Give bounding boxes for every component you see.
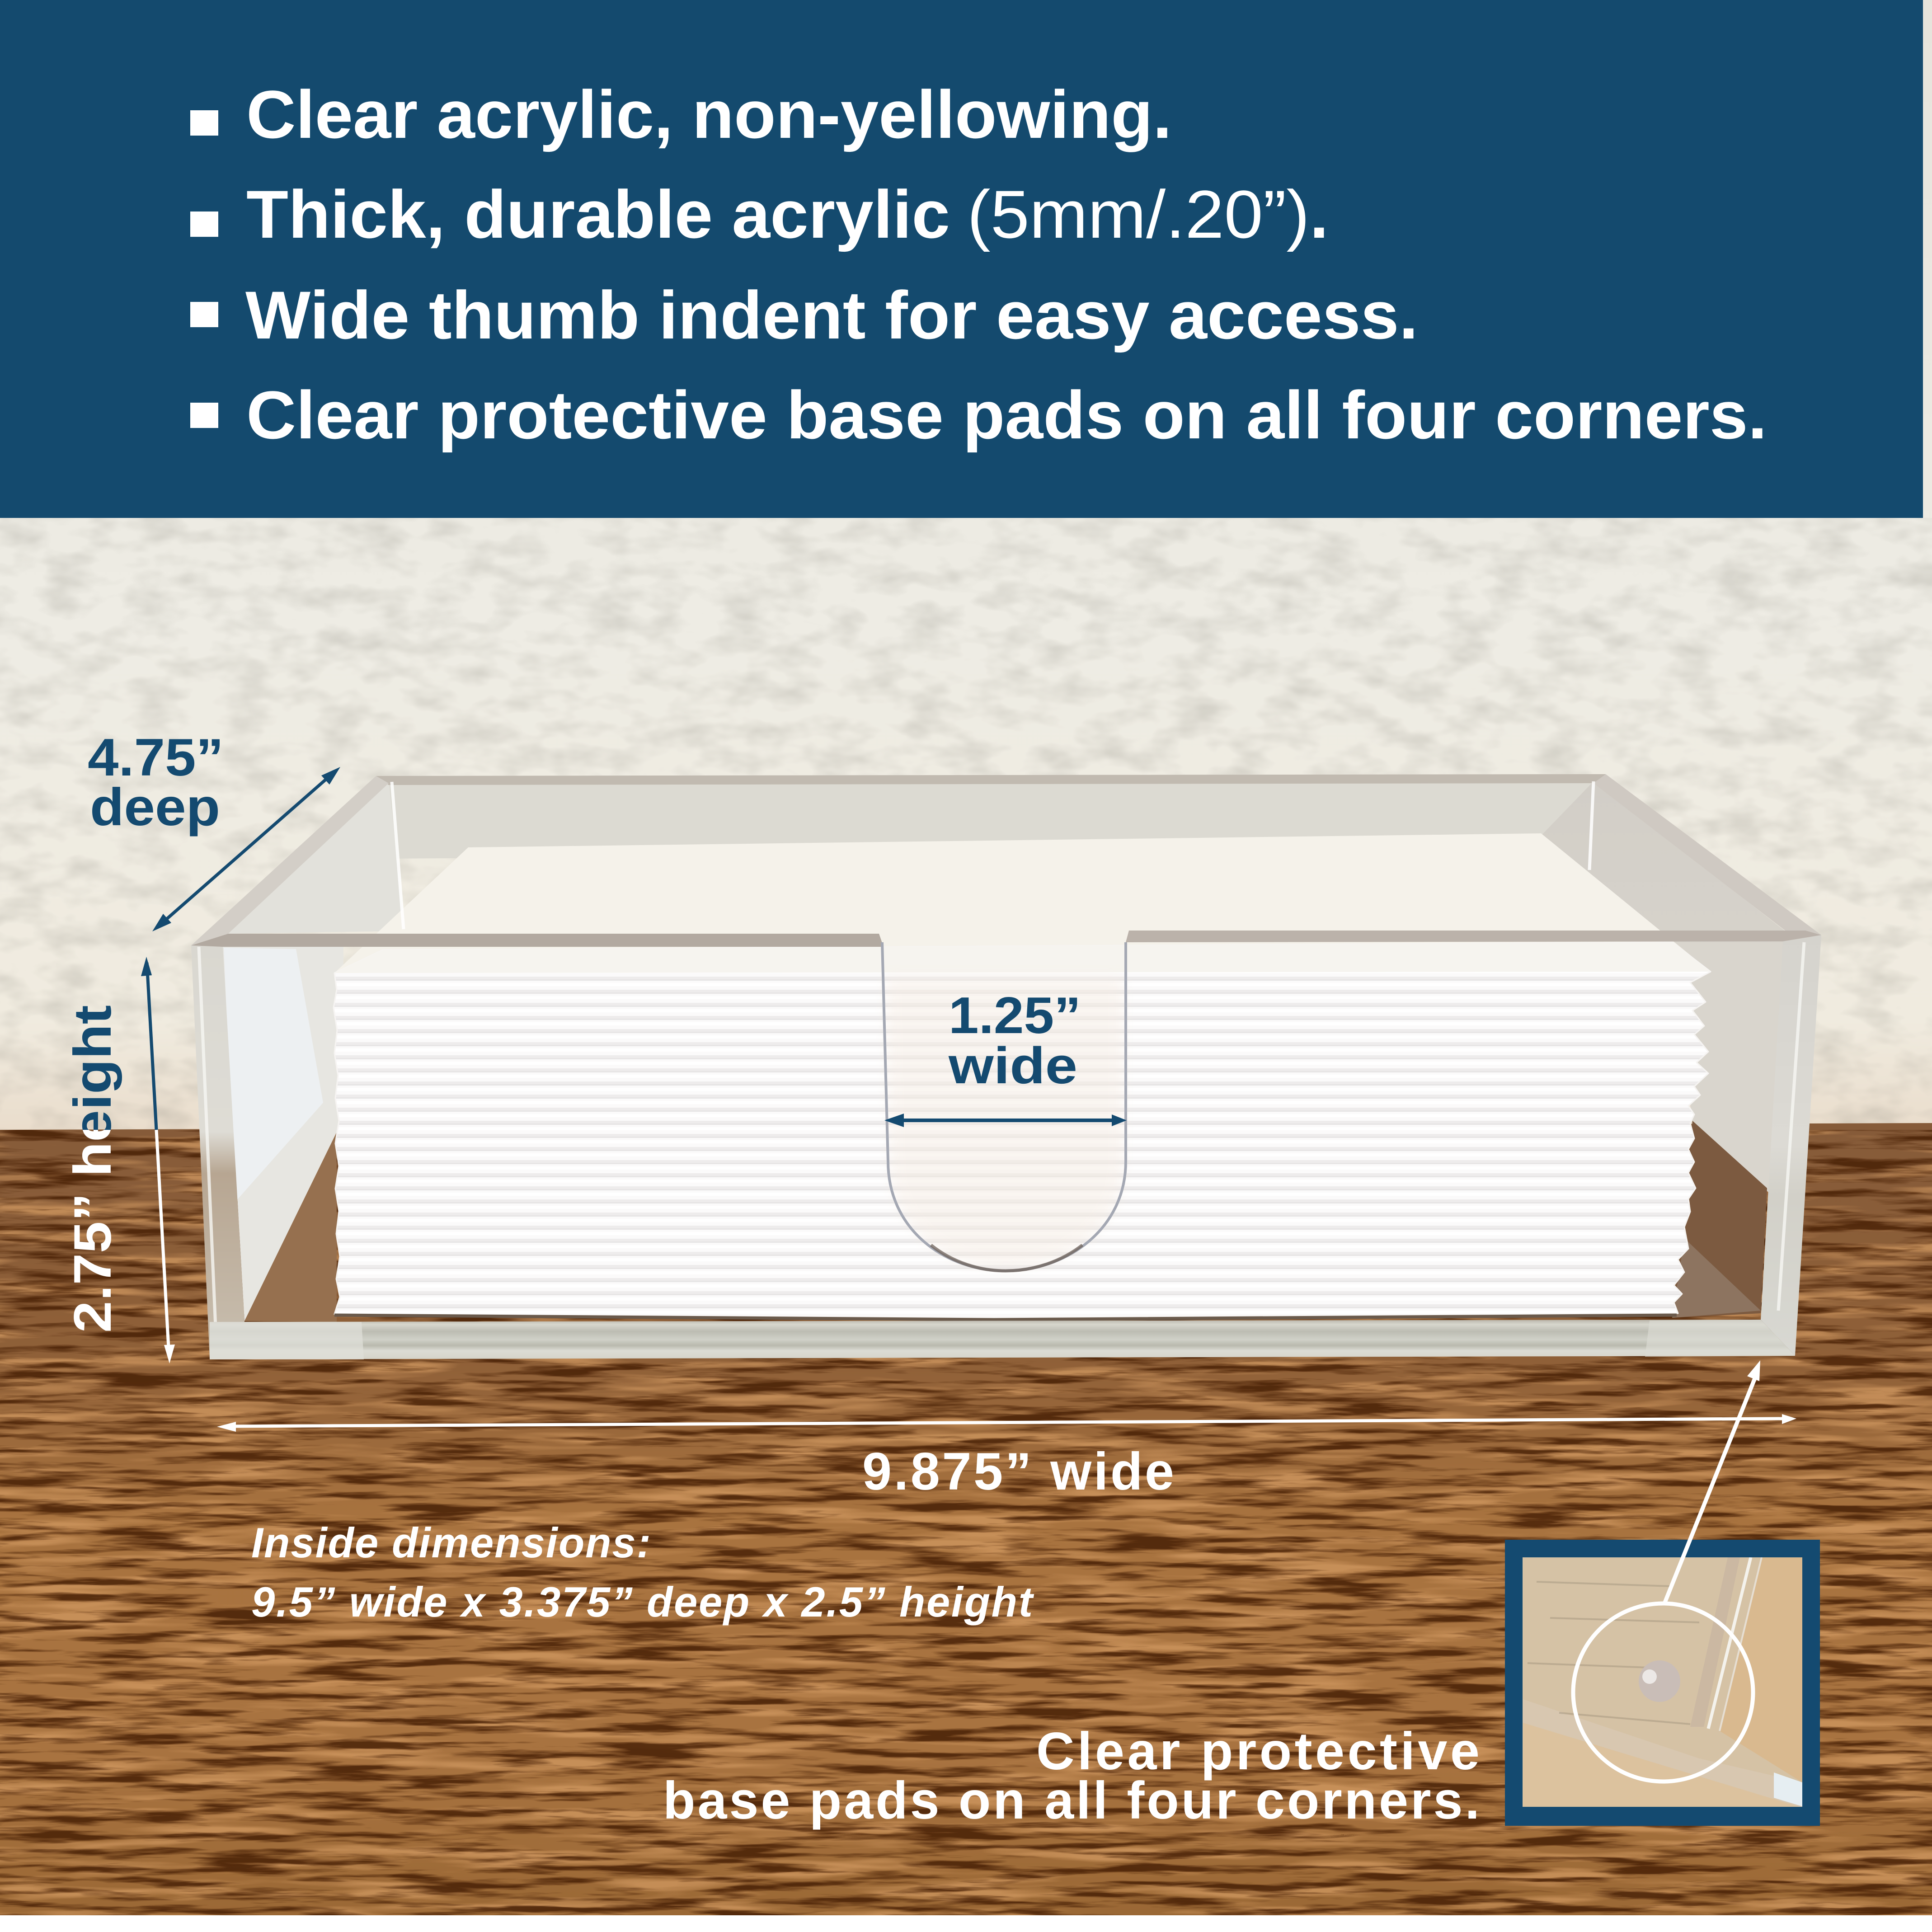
inside dimensions note: Inside dimensions: <box>251 1519 651 1566</box>
bullet list item 2: Thick, durable acrylic <box>246 176 950 252</box>
right pillar <box>1761 935 1821 1356</box>
bullet list item 4: Clear protective base pads on all four corners. <box>246 377 1767 453</box>
notch width label <box>948 987 1081 1095</box>
base pad caption <box>663 1721 1480 1830</box>
napkin top surface <box>334 833 1711 973</box>
notch width label: wide <box>948 1037 1077 1095</box>
left inner side panel <box>223 780 404 1322</box>
acrylic napkin holder with napkins <box>191 774 1821 1359</box>
bullet list item 2: (5mm/.20”) <box>967 176 1310 252</box>
front bottom band <box>210 1320 1795 1359</box>
highlight circle <box>1573 1603 1753 1782</box>
napkin stack <box>334 942 1711 1320</box>
left pillar <box>191 945 244 1359</box>
depth label: deep <box>90 777 220 837</box>
right top edge <box>1594 774 1821 935</box>
pad pointer arrow <box>1664 1360 1760 1603</box>
back panel of holder <box>376 774 1606 859</box>
depth label <box>88 728 224 837</box>
wooden table surface <box>0 1123 1932 1932</box>
bullet list item 2: . <box>1310 176 1329 252</box>
overall width label: 9.875” wide <box>862 1442 1174 1501</box>
inset photo: base pad <box>1505 1360 1820 1826</box>
bullet list item 3: Wide thumb indent for easy access. <box>245 277 1418 353</box>
thumb notch outline <box>882 942 1126 1271</box>
bullet list item 1: Clear acrylic, non-yellowing. <box>246 76 1172 152</box>
depth arrow <box>152 767 340 931</box>
rubber pad <box>1639 1660 1680 1702</box>
base pad caption: Clear protective <box>1036 1721 1480 1781</box>
front left rim <box>191 934 884 947</box>
bullet list item 2 <box>190 176 1329 252</box>
overall width arrow <box>217 1414 1796 1432</box>
inside dimensions note <box>251 1519 1034 1626</box>
depth label: 4.75” <box>88 728 224 787</box>
notch lower curve shadow <box>931 1245 1082 1271</box>
notch width arrow <box>884 1114 1127 1127</box>
notch width label: 1.25” <box>949 987 1081 1044</box>
height label: 2.75” height <box>63 1005 122 1333</box>
front right rim <box>1126 931 1821 942</box>
right inner side panel <box>1528 781 1785 1318</box>
inside dimensions note: 9.5” wide x 3.375” deep x 2.5” height <box>251 1578 1034 1626</box>
corner highlights <box>392 781 1594 929</box>
back top edge <box>376 774 1606 785</box>
header banner <box>0 0 1923 518</box>
left top edge <box>191 776 389 945</box>
pillar highlights <box>199 942 1804 1338</box>
height arrow <box>141 957 175 1363</box>
thumb notch tint <box>886 976 1123 1268</box>
base pad caption: base pads on all four corners. <box>663 1771 1480 1830</box>
wall background <box>0 0 1932 1134</box>
